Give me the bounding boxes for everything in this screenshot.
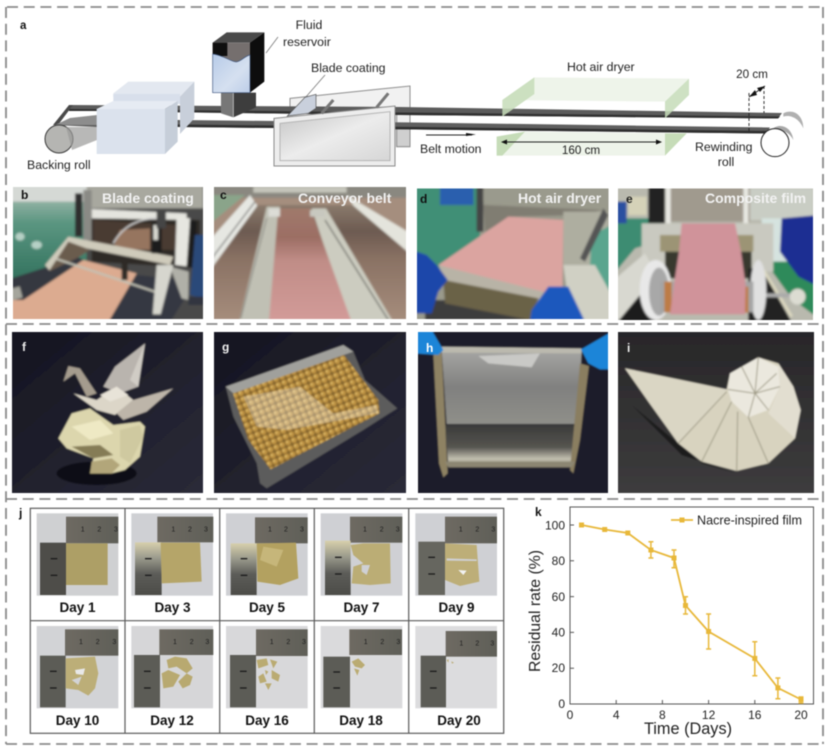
schematic labels [27,18,753,172]
day 16 tile: 1 [270,639,274,646]
day 12 tile: 2 [190,639,194,646]
panel f: origami crane on crumpled film [7,327,210,497]
title: blade coating: Blade coating [102,190,194,206]
title: composite film: Composite film [705,190,806,206]
day 9 tile: 1 [459,527,463,534]
day 10 tile: 2 [96,639,100,646]
hot air dryer upper half [502,77,689,118]
day 10 tile [37,626,118,708]
20 cm dimension: 20 cm [736,68,768,81]
front blade frame [274,106,395,166]
day 12 tile: 1 [173,639,177,646]
day 5 tile: 3 [300,527,304,534]
day 5 tile [226,513,308,596]
day 20 tile: 2 [475,641,479,648]
day 12 tile [131,626,213,708]
day 1 tile: 3 [114,527,118,534]
day captions: Day 3 [154,600,191,615]
x axis ticks: 8 [659,708,666,722]
schematic labels: Fluid [296,18,322,32]
x axis ticks [567,708,808,722]
y axis ticks [545,518,565,711]
day 18 tile [321,626,402,708]
day 1 tile [37,513,118,596]
schematic labels: reservoir [283,35,331,49]
photo f [11,331,204,494]
day captions: Day 1 [59,600,96,615]
grid tile photos [37,513,497,708]
label c: c [220,188,227,202]
day 9 tile: 3 [491,527,495,534]
panel b: blade coating photo [7,185,210,325]
belt shadow to roll [66,127,97,150]
title: hot air dryer: Hot air dryer [518,190,602,206]
day captions: Day 12 [150,713,194,728]
panel k: residual rate line chart [527,505,814,738]
label k: k [535,505,542,519]
x axis ticks: 0 [567,708,574,722]
chart axes [570,507,814,704]
label b: b [21,188,28,202]
label e: e [626,192,633,206]
legend: Nacre-inspired film [697,514,802,528]
y axis ticks: 0 [558,697,565,711]
day 5 tile: 1 [268,527,272,534]
day captions: Day 9 [438,600,475,615]
160 cm dimension [501,140,662,157]
label f: f [22,340,27,354]
blade and rods [287,93,388,116]
photo h [417,331,609,494]
day 3 tile: 2 [188,527,192,534]
day 20 tile: 3 [490,641,494,648]
panel d: hot air dryer photo [412,185,615,325]
photo e [617,188,814,321]
backing roll [45,125,73,153]
day 3 tile: 3 [204,527,208,534]
belt motion arrow [420,133,482,156]
day captions: Day 7 [343,600,380,615]
day 20 tile [415,626,497,708]
photo b [12,186,204,320]
x axis ticks: 20 [794,708,808,722]
schematic labels: Rewinding [695,140,753,154]
front feed block [97,101,178,154]
x axis ticks: 4 [613,708,620,722]
title: conveyor belt: Conveyor belt [298,190,392,206]
day captions: Day 10 [56,713,99,728]
day 18 tile: 1 [364,639,368,646]
day captions [56,600,481,728]
photo g [213,331,407,494]
panel j: degradation photo grid [18,506,504,733]
day captions: Day 5 [249,600,286,615]
y axis ticks: 80 [552,554,565,568]
y axis ticks: 40 [552,626,565,640]
panel g: sealed bag of soybeans [207,327,413,497]
day 10 tile: 3 [112,639,116,646]
panel c: conveyor belt photo [207,185,413,325]
schematic labels: Backing roll [27,158,91,172]
schematic labels: Hot air dryer [567,60,635,74]
label i: i [627,341,630,355]
x axis title: Time (Days) [644,720,732,738]
y axis ticks: 100 [545,518,565,532]
day 18 tile: 3 [396,639,400,646]
day 7 tile [321,513,402,596]
day 5 tile: 2 [284,527,288,534]
day 3 tile [131,513,213,596]
y axis ticks: 60 [552,590,565,604]
hot air dryer lower half [497,132,687,156]
grid lines [30,508,504,733]
day 20 tile: 1 [459,641,463,648]
x axis ticks: 16 [748,708,762,722]
day 1 tile: 2 [97,527,101,534]
day captions: Day 16 [245,713,289,728]
day 16 tile: 2 [286,639,290,646]
label h: h [426,341,433,355]
conveyor belts [53,105,782,134]
back blade frame [290,86,410,147]
day 7 tile: 1 [363,527,367,534]
photo c [213,186,407,320]
label d: d [420,192,427,206]
day 3 tile: 1 [171,527,175,534]
data series [579,522,804,703]
panel e: composite film photo [612,185,818,325]
label g: g [222,340,229,354]
y axis ticks: 20 [552,661,565,675]
day 18 tile: 2 [380,639,384,646]
leader lines [266,37,325,98]
day 7 tile: 3 [396,527,400,534]
x axis ticks: 12 [702,708,716,722]
day 12 tile: 3 [205,639,209,646]
panel h: water-filled film bag [412,327,615,497]
belt motion arrow: Belt motion [420,142,482,156]
coating nozzle [221,93,256,117]
day 1 tile: 1 [81,527,85,534]
back feed block [113,82,194,134]
day 9 tile [415,513,497,596]
day captions: Day 20 [437,713,481,728]
160 cm dimension: 160 cm [562,144,600,157]
rewinding roll [761,112,803,157]
schematic labels: roll [718,155,734,169]
panel label a: a [20,20,27,32]
day 16 tile: 3 [302,639,306,646]
y axis title: Residual rate (%) [527,550,544,672]
photo i [617,331,815,494]
label j: j [18,506,22,520]
day 7 tile: 2 [380,527,384,534]
panel i: origami nautilus shell [612,327,822,497]
schematic labels: Blade coating [311,61,386,75]
20 cm dimension [736,68,768,132]
fluid reservoir [213,32,264,93]
day 16 tile [226,626,308,708]
panel a: roll-to-roll coating schematic [20,18,803,172]
day captions: Day 18 [339,713,383,728]
day 9 tile: 2 [475,527,479,534]
photo d [416,188,610,320]
day 10 tile: 1 [79,639,83,646]
